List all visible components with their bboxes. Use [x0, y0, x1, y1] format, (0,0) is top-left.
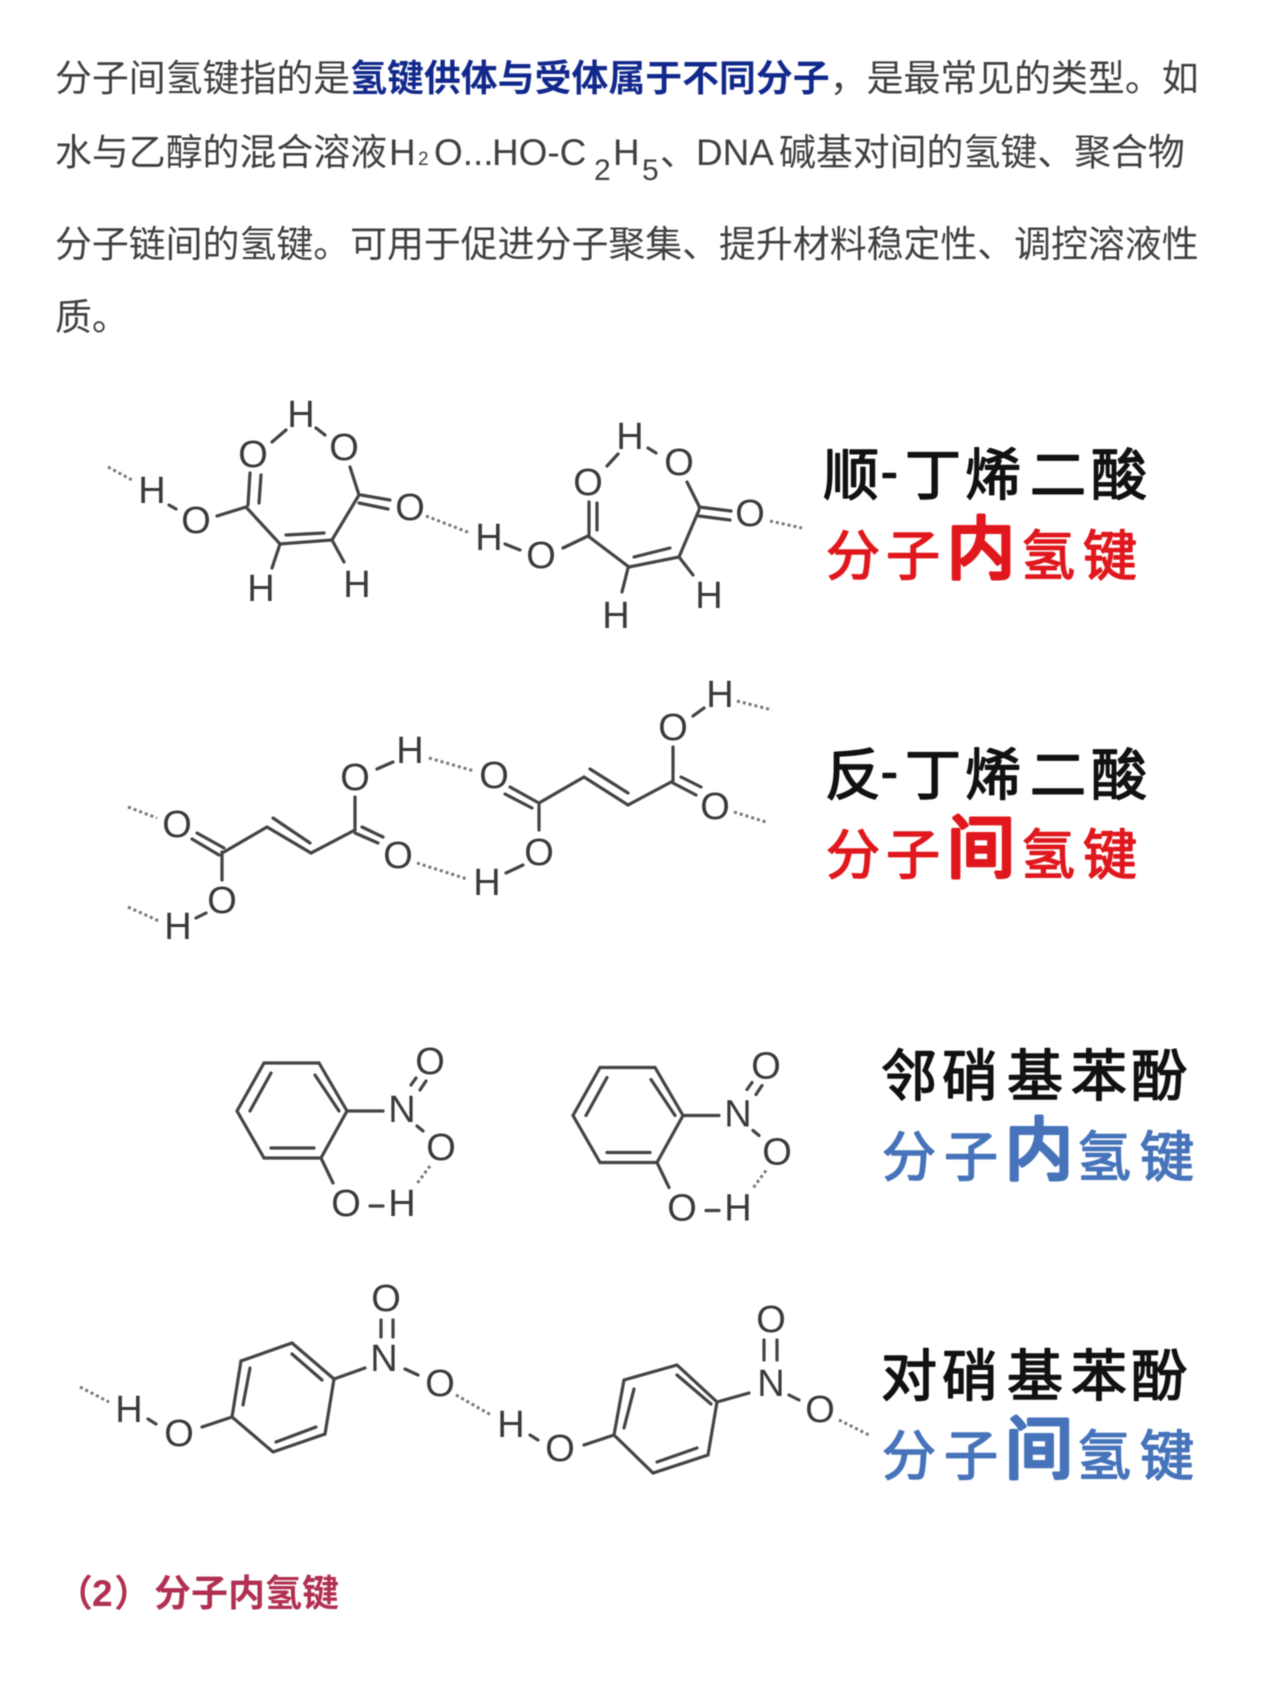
label: fumaric acid: [825, 731, 1147, 892]
heading: intramolecular hydrogen bond: 2: [92, 1573, 113, 1614]
intro text block: [55, 58, 1199, 338]
p-nitrophenol molecule one: N: [370, 1338, 398, 1380]
p-nitrophenol molecule two: O: [545, 1428, 575, 1470]
maleic acid molecule one: [108, 394, 470, 610]
maleic acid molecule one: H: [138, 470, 166, 512]
label: p-nitrophenol: 间: [1005, 1394, 1073, 1493]
label: p-nitrophenol: 氢: [1077, 1412, 1131, 1491]
maleic acid molecule two: O: [526, 535, 556, 577]
o-nitrophenol molecule one: O: [415, 1041, 445, 1083]
p-nitrophenol molecule two: O: [805, 1389, 835, 1431]
molecule: fumaric acid pair: H: [473, 862, 501, 904]
label: fumaric acid: 二: [1030, 731, 1086, 812]
label: maleic acid: 丁: [905, 431, 961, 512]
o-nitrophenol molecule two: O: [751, 1046, 781, 1088]
maleic acid molecule two: H: [616, 416, 644, 458]
label: o-nitrophenol: 邻: [881, 1032, 937, 1113]
label: o-nitrophenol: 氢: [1077, 1113, 1131, 1192]
label: maleic acid: 氢: [1021, 512, 1075, 591]
label: maleic acid: -: [881, 444, 898, 500]
o-nitrophenol molecule two: N: [724, 1094, 752, 1136]
p-nitrophenol molecule one: [80, 1278, 491, 1455]
o-nitrophenol molecule one: O: [331, 1183, 361, 1225]
o-nitrophenol molecule one: H: [388, 1183, 416, 1225]
label: maleic acid: 酸: [1091, 431, 1147, 512]
p-nitrophenol molecule one: O: [371, 1278, 401, 1320]
label: o-nitrophenol: 苯: [1071, 1032, 1127, 1113]
o-nitrophenol molecule two: H: [724, 1188, 752, 1230]
label: o-nitrophenol: 酚: [1131, 1032, 1187, 1113]
label: o-nitrophenol: [881, 1032, 1194, 1194]
molecule: fumaric acid pair: O: [340, 757, 370, 799]
intro text block: O...: [434, 132, 493, 173]
intro text block: 水与乙醇的混合溶液: [55, 132, 387, 173]
molecule: fumaric acid pair: O: [207, 880, 237, 922]
maleic acid molecule two: O: [664, 442, 694, 484]
label: fumaric acid: 间: [947, 793, 1015, 892]
intro text block: 、: [660, 132, 697, 173]
molecule: fumaric acid pair: O: [524, 832, 554, 874]
intro text block: 分子间氢键指的是氢键供体与受体属于不同分子，是最常见的类型。如: [55, 58, 1199, 99]
p-nitrophenol molecule one: H: [115, 1389, 143, 1431]
molecule: p-nitrophenol pair: [80, 1278, 869, 1473]
label: maleic acid: 烯: [965, 431, 1021, 512]
p-nitrophenol molecule two: O: [756, 1299, 786, 1341]
o-nitrophenol molecule two: O: [762, 1132, 792, 1174]
label: o-nitrophenol: 键: [1140, 1113, 1194, 1192]
maleic acid molecule one: H: [343, 564, 371, 606]
heading: intramolecular hydrogen bond: 分子内氢键: [154, 1573, 339, 1614]
label: fumaric acid: 子: [886, 811, 940, 890]
label: o-nitrophenol: 分: [882, 1113, 936, 1192]
p-nitrophenol molecule two: [497, 1299, 869, 1473]
label: p-nitrophenol: 硝: [942, 1332, 998, 1413]
maleic acid molecule one: O: [238, 434, 268, 476]
intro text block: 质。: [55, 297, 129, 338]
intro text block: HO-C: [492, 132, 586, 173]
label: p-nitrophenol: 子: [944, 1412, 998, 1491]
maleic acid molecule one: H: [287, 394, 315, 436]
label: maleic acid: 分: [826, 512, 880, 591]
maleic acid molecule two: H: [602, 595, 630, 637]
maleic acid molecule one: O: [329, 427, 359, 469]
heading: intramolecular hydrogen bond: ）: [114, 1573, 151, 1614]
intro text block: H: [389, 132, 416, 173]
heading: intramolecular hydrogen bond: （: [56, 1573, 93, 1614]
label: p-nitrophenol: 键: [1140, 1412, 1194, 1491]
maleic acid molecule one: O: [395, 487, 425, 529]
intro text block: 碱基对间的氢键、聚合物: [779, 132, 1185, 173]
intro text block: 2: [418, 149, 429, 170]
maleic acid molecule two: O: [735, 493, 765, 535]
label: fumaric acid: 反: [825, 731, 881, 812]
p-nitrophenol molecule one: O: [425, 1363, 455, 1405]
maleic acid molecule two: O: [573, 462, 603, 504]
label: p-nitrophenol: 对: [881, 1332, 937, 1413]
o-nitrophenol molecule one: O: [426, 1127, 456, 1169]
maleic acid molecule two: H: [475, 517, 503, 559]
o-nitrophenol molecule one: N: [388, 1089, 416, 1131]
maleic acid molecule two: H: [695, 575, 723, 617]
intro text block: 5: [642, 154, 659, 187]
label: maleic acid: [823, 431, 1147, 593]
o-nitrophenol molecule one: [237, 1041, 456, 1225]
molecule: maleic acid pair: [108, 394, 802, 637]
intro text block: H: [613, 132, 640, 173]
maleic acid molecule one: O: [181, 500, 211, 542]
label: fumaric acid: 丁: [905, 731, 961, 812]
molecule: fumaric acid pair: H: [396, 730, 424, 772]
label: o-nitrophenol: 内: [1005, 1095, 1073, 1194]
label: p-nitrophenol: 基: [1007, 1332, 1063, 1413]
label: o-nitrophenol: 子: [944, 1113, 998, 1192]
label: o-nitrophenol: 硝: [942, 1032, 998, 1113]
p-nitrophenol molecule two: H: [497, 1404, 525, 1446]
molecule: o-nitrophenol pair: [237, 1041, 792, 1230]
label: fumaric acid: 酸: [1091, 731, 1147, 812]
heading: intramolecular hydrogen bond: [56, 1573, 339, 1614]
label: fumaric acid: 氢: [1021, 811, 1075, 890]
molecule: fumaric acid pair: O: [658, 707, 688, 749]
label: fumaric acid: -: [881, 744, 898, 800]
intro text block: 2: [594, 154, 611, 187]
molecule: fumaric acid pair: [128, 674, 772, 948]
molecule: fumaric acid pair: O: [383, 835, 413, 877]
p-nitrophenol molecule one: O: [164, 1413, 194, 1455]
molecule: fumaric acid pair: H: [164, 906, 192, 948]
label: maleic acid: 二: [1030, 431, 1086, 512]
intro text block: DNA: [696, 132, 774, 173]
label: fumaric acid: 分: [826, 811, 880, 890]
label: p-nitrophenol: 分: [882, 1412, 936, 1491]
label: p-nitrophenol: [881, 1332, 1194, 1493]
o-nitrophenol molecule two: [573, 1046, 792, 1230]
o-nitrophenol molecule two: O: [667, 1188, 697, 1230]
molecule: fumaric acid pair: O: [479, 755, 509, 797]
molecule: fumaric acid pair: O: [162, 804, 192, 846]
label: maleic acid: 子: [886, 512, 940, 591]
label: p-nitrophenol: 苯: [1071, 1332, 1127, 1413]
molecule: fumaric acid pair: H: [706, 674, 734, 716]
intro text block: 分子链间的氢键。可用于促进分子聚集、提升材料稳定性、调控溶液性: [55, 224, 1199, 265]
label: o-nitrophenol: 基: [1007, 1032, 1063, 1113]
label: maleic acid: 顺: [823, 431, 879, 512]
p-nitrophenol molecule two: N: [757, 1363, 785, 1405]
maleic acid molecule two: [475, 416, 802, 637]
label: maleic acid: 键: [1083, 512, 1137, 591]
molecule: fumaric acid pair: O: [700, 786, 730, 828]
label: maleic acid: 内: [947, 494, 1015, 593]
maleic acid molecule one: H: [247, 568, 275, 610]
label: fumaric acid: 键: [1083, 811, 1137, 890]
label: p-nitrophenol: 酚: [1131, 1332, 1187, 1413]
label: fumaric acid: 烯: [965, 731, 1021, 812]
